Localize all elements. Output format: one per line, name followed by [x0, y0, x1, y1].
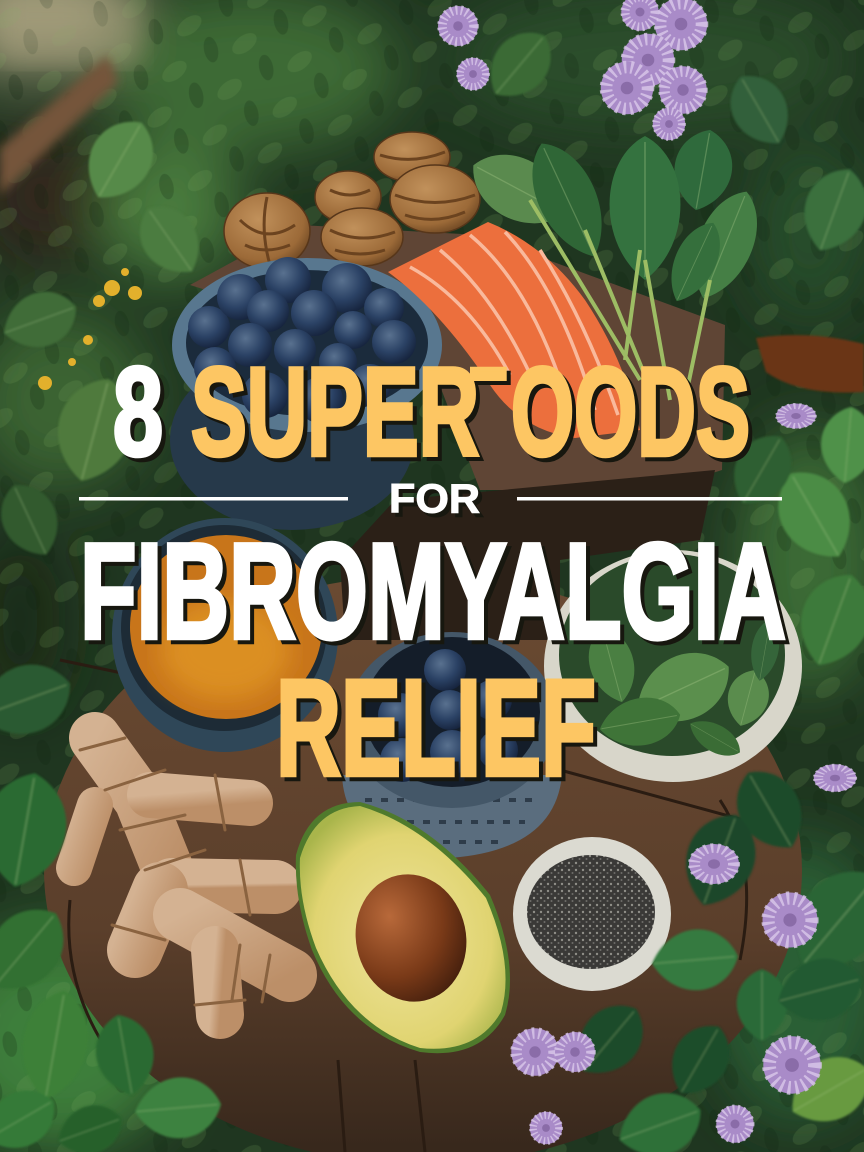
bottom-right leaves	[562, 757, 864, 1152]
title line: 8 Superfoods: SUPER	[191, 343, 479, 482]
small blueberry jar	[342, 632, 562, 858]
divider right	[517, 497, 782, 500]
title line: 8 Superfoods	[114, 364, 752, 462]
avocado half	[296, 802, 510, 1053]
ginger root	[74, 738, 290, 1015]
blueberry bowl	[170, 257, 442, 530]
walnuts	[224, 132, 480, 269]
title line: 8 Superfoods: 8	[113, 343, 163, 482]
spinach bowl	[544, 550, 802, 782]
purple flowers	[438, 0, 856, 1144]
brick garden edge	[0, 55, 118, 195]
stump table	[44, 575, 802, 1152]
title line: 8 Superfoods: F	[466, 343, 508, 482]
clay pot at right	[756, 335, 864, 393]
yellow wildflowers	[38, 268, 142, 390]
background foliage	[0, 18, 864, 677]
title line: relief: RELIEF	[276, 652, 596, 805]
lower stump trunk	[340, 470, 715, 640]
turmeric bowl	[112, 518, 338, 752]
spinach bunch	[459, 125, 772, 400]
wood plank cracks	[60, 660, 780, 1152]
salmon fillet	[388, 222, 640, 438]
title	[80, 343, 786, 805]
word: for: FOR	[389, 476, 480, 522]
chia seed bowl	[513, 837, 671, 991]
bottom-left leaves	[0, 652, 224, 1152]
divider left	[79, 497, 348, 500]
upper wooden board	[190, 225, 725, 490]
